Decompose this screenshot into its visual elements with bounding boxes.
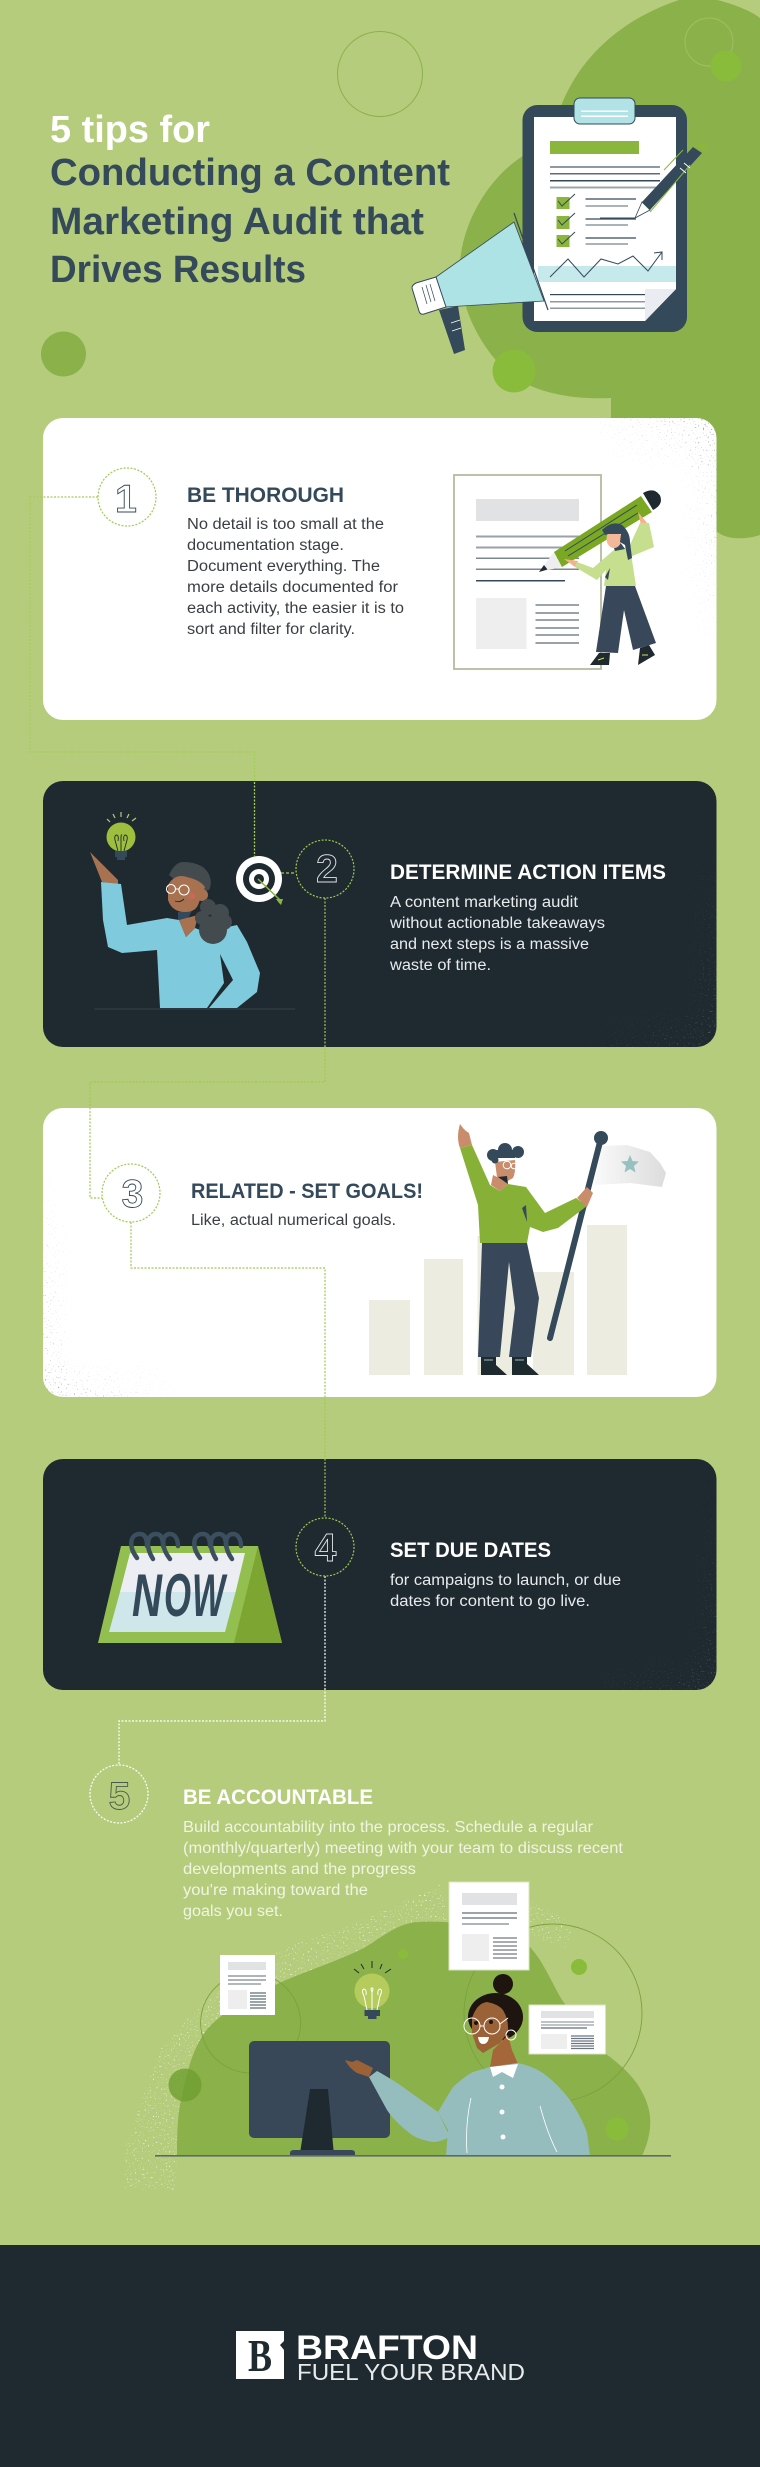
panel: tip 3 (43, 1108, 716, 1397)
step badge 4 (296, 1518, 354, 1576)
illustration: presenting woman (345, 1974, 590, 2156)
body text (390, 1572, 621, 1610)
body text (183, 1819, 624, 1920)
step badge 5: 5 (109, 1775, 130, 1818)
illustration: woman pointing (90, 852, 295, 1010)
illustration: flag (550, 1131, 666, 1338)
logo: FUEL YOUR BRAND (297, 2359, 525, 2385)
icon: light bulb (106, 812, 136, 860)
speckle texture (125, 1885, 575, 2190)
body text: Like, actual numerical goals. (191, 1212, 396, 1229)
icon: NOW desk calendar: N (132, 1562, 163, 1629)
illustration: accountability scene (125, 1882, 671, 2190)
footer band (0, 2245, 760, 2467)
body text: documentation stage. (187, 537, 344, 554)
illustration: woman with pencil (539, 490, 661, 665)
icon: clipboard with checklist (522, 98, 687, 332)
step badge 4: 4 (315, 1527, 337, 1570)
title (50, 109, 450, 291)
body text: for campaigns to launch, or due (390, 1572, 621, 1589)
speckle texture (602, 872, 716, 1047)
icon: NOW desk calendar: W (192, 1562, 228, 1629)
logo (236, 2329, 525, 2385)
connector lines between tips (30, 497, 325, 1765)
green blob (177, 1922, 650, 2156)
body text: developments and the progress (183, 1861, 416, 1878)
bar chart (369, 1225, 627, 1375)
illustration: man holding flag (458, 1124, 593, 1375)
illustration: document (454, 475, 601, 669)
body text: Build accountability into the process. Schedule a regular (183, 1819, 593, 1836)
step badge 5 (90, 1765, 148, 1823)
document 3 (529, 2005, 606, 2054)
step badge 3: 3 (122, 1173, 143, 1216)
panel: tip 4 (43, 1459, 716, 1690)
title: Conducting a Content (50, 152, 450, 194)
logo: B (248, 2330, 272, 2381)
body text: each activity, the easier it is to (187, 600, 404, 617)
icon: megaphone (412, 213, 548, 354)
step badge 3 (102, 1164, 160, 1222)
title: Drives Results (50, 249, 306, 291)
speckle texture (604, 1507, 716, 1690)
icon: NOW desk calendar: O (164, 1562, 191, 1629)
body text: you're making toward the (183, 1882, 368, 1899)
body text (389, 894, 605, 974)
header illustration backdrop: green blob and circles (41, 0, 760, 538)
icon: NOW desk calendar (98, 1534, 282, 1643)
heading: DETERMINE ACTION ITEMS (390, 861, 666, 884)
body text: A content marketing audit (390, 894, 579, 911)
step badge 1 (98, 468, 156, 526)
icon: light bulb (354, 1961, 391, 2019)
heading: BE THOROUGH (187, 484, 344, 507)
heading: SET DUE DATES (390, 1539, 551, 1562)
body text: dates for content to go live. (390, 1593, 590, 1610)
heading: BE ACCOUNTABLE (183, 1786, 373, 1809)
panel: tip 1 (43, 418, 716, 720)
panel: tip 2 (43, 781, 716, 1047)
step badge 1: 1 (115, 478, 137, 521)
computer monitor (249, 2041, 390, 2156)
body text: without actionable takeaways (389, 915, 605, 932)
icon: pen (600, 140, 709, 218)
document 1 (220, 1955, 275, 2015)
desk line (155, 2155, 671, 2157)
body text: (monthly/quarterly) meeting with your team to discuss recent (183, 1840, 624, 1857)
body text: waste of time. (389, 957, 491, 974)
body text (187, 516, 404, 638)
body text: Document everything. The (187, 558, 380, 575)
step badge 2 (296, 840, 354, 898)
body text: No detail is too small at the (187, 516, 384, 533)
section: tip 5 text (183, 1786, 624, 1920)
body text: more details documented for (187, 579, 398, 596)
body text: and next steps is a massive (390, 936, 589, 953)
document 2 (449, 1882, 529, 1970)
decorative circles (168, 1924, 642, 2140)
title: Marketing Audit that (50, 201, 424, 243)
title: 5 tips for (50, 109, 210, 151)
step badge 2: 2 (316, 848, 338, 891)
icon: target with arrow (236, 856, 283, 905)
speckle texture (43, 1188, 165, 1397)
body text: sort and filter for clarity. (187, 621, 355, 638)
body text: goals you set. (183, 1903, 283, 1920)
speckle texture (598, 418, 716, 630)
heading: RELATED - SET GOALS! (191, 1180, 423, 1203)
logo: BRAFTON (296, 2329, 478, 2367)
